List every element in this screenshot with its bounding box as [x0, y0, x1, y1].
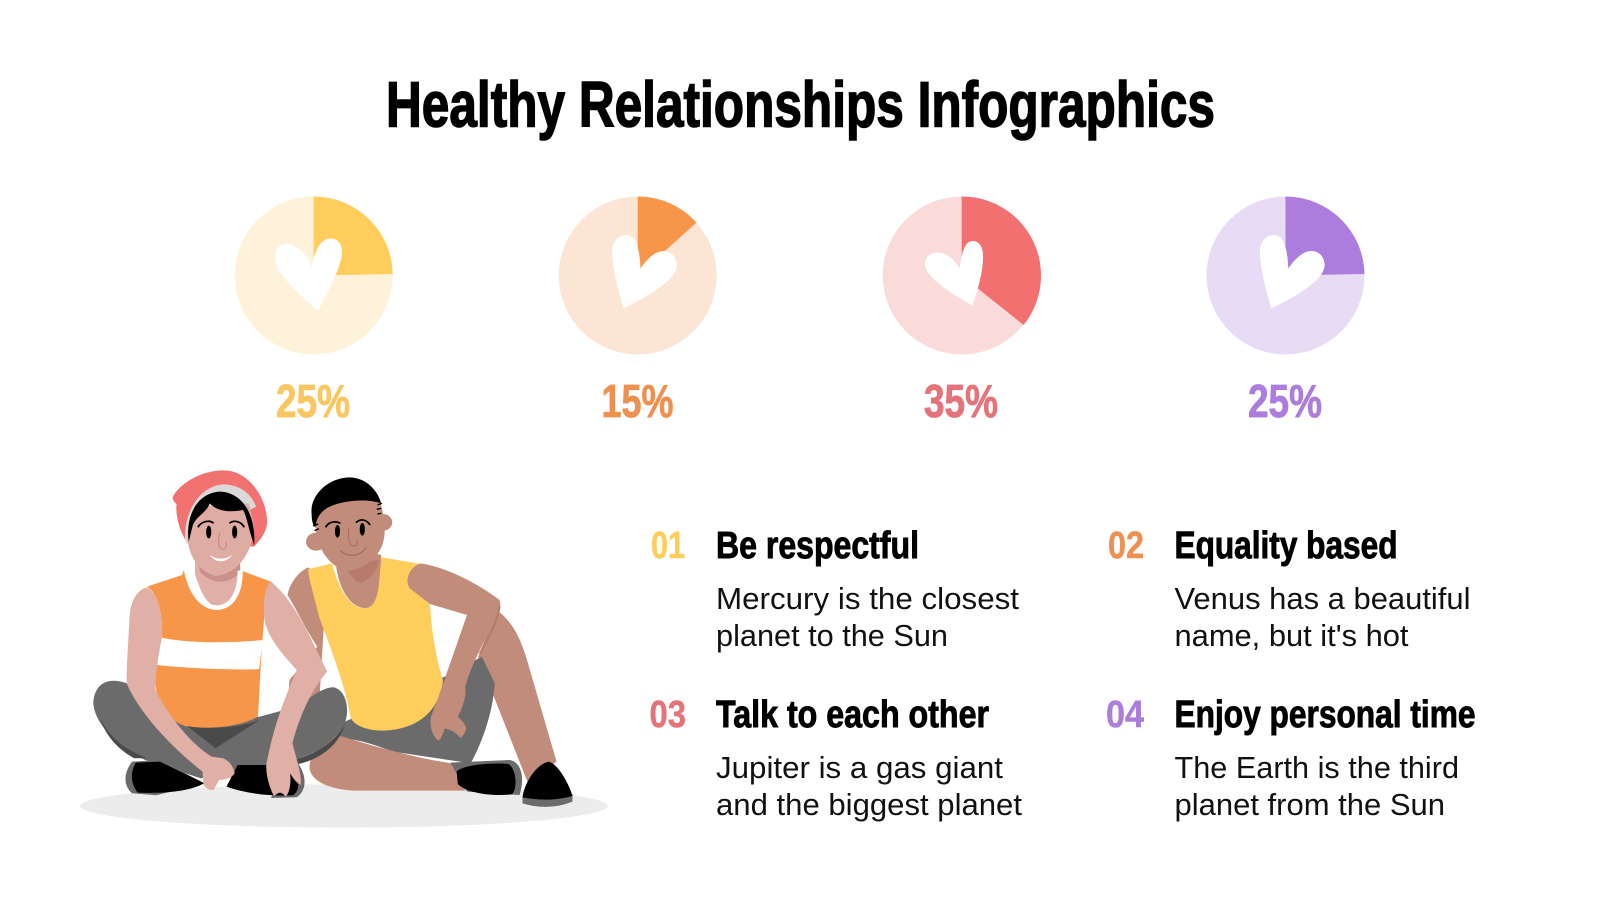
item 01: be respectful: Be respectful: [716, 525, 919, 567]
item 04: enjoy personal time: 04: [1106, 694, 1144, 736]
item 04: enjoy personal time: The Earth is the third: [1174, 751, 1459, 785]
item 01: be respectful: 01: [651, 525, 685, 567]
illustration: two friends sitting: [80, 470, 608, 828]
item 03: talk to each other: Talk to each other: [716, 694, 989, 736]
item 02: equality based: name, but it's hot: [1174, 619, 1409, 653]
pie chart: 35% red: [883, 196, 1041, 427]
right person: [288, 477, 572, 807]
pie chart: 25% purple: [1206, 196, 1364, 427]
pie chart: 25% yellow: 25%: [276, 375, 350, 427]
item 01: be respectful: [651, 525, 1020, 653]
item 02: equality based: 02: [1108, 525, 1144, 567]
item 03: talk to each other: [650, 694, 1023, 822]
item 02: equality based: Equality based: [1174, 525, 1398, 567]
item 03: talk to each other: 03: [650, 694, 686, 736]
pie chart: 25% yellow: [235, 196, 393, 427]
item 02: equality based: Venus has a beautiful: [1174, 582, 1470, 616]
item 02: equality based: [1108, 525, 1470, 653]
pie chart: 15% orange: [559, 196, 717, 427]
item 04: enjoy personal time: [1106, 694, 1476, 822]
item 01: be respectful: planet to the Sun: [716, 619, 948, 653]
item 01: be respectful: Mercury is the closest: [716, 582, 1020, 616]
pie chart: 25% purple: 25%: [1248, 375, 1322, 427]
item 04: enjoy personal time: Enjoy personal time: [1174, 694, 1476, 736]
pie chart: 35% red: 35%: [924, 375, 998, 427]
title: Healthy Relationships Infographics: [386, 68, 1215, 140]
ground shadow: [80, 784, 608, 828]
item 03: talk to each other: Jupiter is a gas giant: [716, 751, 1004, 785]
item 03: talk to each other: and the biggest planet: [716, 788, 1023, 822]
left person: [93, 470, 347, 798]
item 04: enjoy personal time: planet from the Sun: [1174, 788, 1445, 822]
pie chart: 15% orange: 15%: [602, 375, 674, 427]
